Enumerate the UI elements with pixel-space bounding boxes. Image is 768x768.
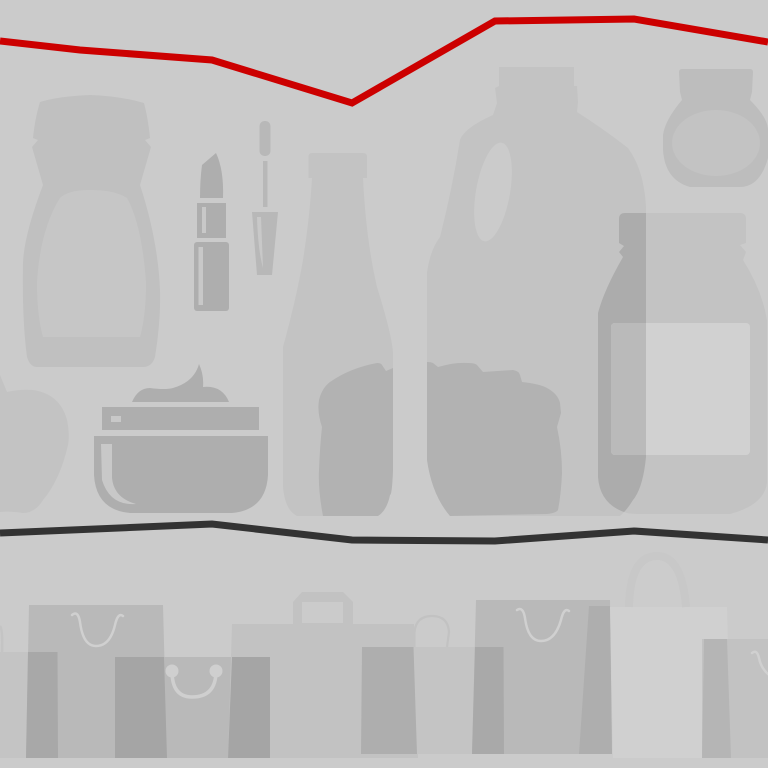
icon: bag with dotted handle	[115, 657, 270, 758]
icon: cream jar	[94, 364, 268, 513]
icon: coffee jar	[23, 95, 160, 367]
icon: apple	[0, 375, 69, 513]
icon: lipstick	[194, 153, 229, 311]
icon: light bag with tall handle	[610, 556, 731, 758]
icon: bread behind bottle	[318, 363, 393, 516]
line: black trend	[0, 524, 768, 541]
icon: bag far left	[0, 626, 28, 758]
icon: small jam jar	[663, 69, 768, 187]
icon: milk jug	[427, 67, 646, 516]
icon: ketchup bottle	[283, 153, 393, 516]
icon: tall bag right	[472, 600, 612, 754]
icon: wide bag with square handle	[228, 592, 418, 758]
line: red trend	[0, 19, 768, 103]
panel: upper shelf of products	[0, 67, 768, 516]
icon: large jar with label	[598, 213, 758, 512]
icon: mascara wand	[252, 121, 278, 275]
icon: bread over jug	[427, 362, 562, 516]
icon: bag far right	[702, 639, 768, 758]
icon: tall bag second	[26, 605, 167, 758]
panel: lower row of shopping bags	[0, 556, 768, 758]
icon: small bag with arch handle	[361, 616, 504, 754]
